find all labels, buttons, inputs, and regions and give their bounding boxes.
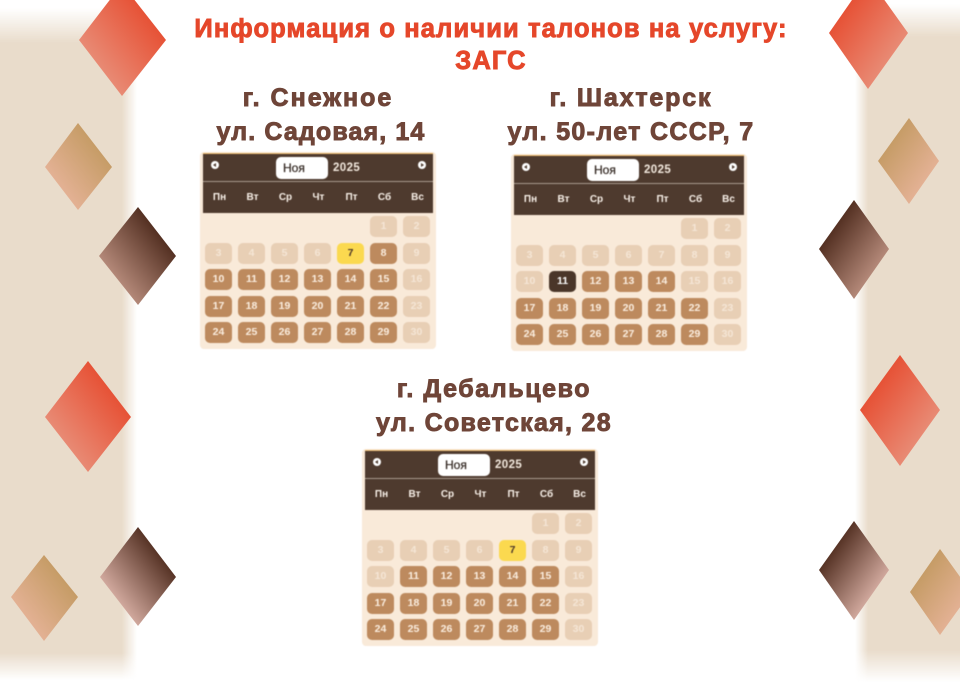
- day grid: 3: [378, 544, 383, 556]
- calendar header: [514, 155, 744, 215]
- day grid: 16: [411, 273, 422, 285]
- month select: Ноя: [283, 161, 305, 175]
- day grid: 11: [557, 275, 568, 287]
- day grid: 8: [543, 544, 548, 556]
- weekdays: Сб: [540, 489, 553, 500]
- day grid: 23: [722, 302, 733, 314]
- heading: Debaltsevo: [376, 375, 612, 437]
- day grid: 29: [378, 326, 389, 338]
- day grid: 28: [507, 623, 518, 635]
- day grid: 21: [656, 302, 667, 314]
- day grid: 9: [576, 544, 581, 556]
- weekdays: Ср: [279, 192, 292, 203]
- day grid: 1: [381, 220, 386, 232]
- heading: Shakhtyorsk: ул. 50-лет СССР, 7: [508, 118, 754, 146]
- calendar: Debaltsevo: [362, 449, 598, 646]
- day grid: 15: [689, 275, 700, 287]
- heading: Snezhnoe: [216, 84, 425, 146]
- day grid: 4: [411, 544, 416, 556]
- weekdays: Пт: [656, 194, 669, 205]
- next arrow: [418, 161, 426, 169]
- day grid: 5: [593, 248, 598, 260]
- month select: [587, 159, 639, 181]
- day grid: 19: [590, 302, 601, 314]
- day grid: 14: [656, 275, 667, 287]
- weekdays: Чт: [624, 194, 635, 205]
- day grid: 22: [540, 596, 551, 608]
- day grid: 17: [375, 596, 386, 608]
- day grid: 5: [444, 544, 449, 556]
- heading: Shakhtyorsk: [507, 84, 754, 146]
- weekdays: Ср: [441, 489, 454, 500]
- weekdays: Вс: [411, 192, 424, 203]
- day grid: [366, 512, 592, 641]
- day grid: 29: [689, 328, 700, 340]
- day grid: 8: [381, 246, 386, 258]
- month select: Ноя: [594, 163, 616, 177]
- day grid: 10: [375, 570, 386, 582]
- day grid: [204, 216, 430, 344]
- weekdays: Вс: [722, 194, 735, 205]
- day grid: 21: [507, 596, 518, 608]
- day grid: 19: [279, 300, 290, 312]
- day grid: 2: [576, 517, 581, 529]
- day grid: 26: [590, 328, 601, 340]
- day grid: 20: [623, 302, 634, 314]
- weekdays: Пн: [524, 194, 537, 205]
- year: 2025: [333, 162, 360, 174]
- title: [194, 15, 788, 75]
- day grid: 10: [213, 273, 224, 285]
- day grid: 15: [540, 570, 551, 582]
- previous arrow: [522, 163, 530, 171]
- heading: Shakhtyorsk: г. Шахтерск: [550, 84, 712, 112]
- day grid: 25: [557, 328, 568, 340]
- day grid: 12: [279, 273, 290, 285]
- day grid: 28: [345, 326, 356, 338]
- day grid: 18: [408, 596, 419, 608]
- day grid: 24: [375, 623, 386, 635]
- day grid: 27: [623, 328, 634, 340]
- day grid: 16: [722, 275, 733, 287]
- day grid: 30: [411, 326, 422, 338]
- day grid: 3: [216, 246, 221, 258]
- weekdays: [374, 489, 586, 500]
- heading: Debaltsevo: г. Дебальцево: [397, 375, 591, 403]
- weekdays: Пн: [375, 489, 388, 500]
- previous arrow: [373, 458, 381, 466]
- day grid: 1: [543, 517, 548, 529]
- day grid: 9: [725, 248, 730, 260]
- day grid: 17: [524, 302, 535, 314]
- weekdays: Вс: [573, 489, 586, 500]
- title: Информация о наличии талонов на услугу:: [194, 15, 788, 43]
- day grid: 5: [282, 246, 287, 258]
- day grid: 9: [414, 246, 419, 258]
- weekdays: Вт: [558, 194, 570, 205]
- weekdays: Вт: [408, 489, 420, 500]
- day grid: 26: [441, 623, 452, 635]
- right background band: [857, 10, 960, 677]
- year: 2025: [644, 164, 671, 176]
- day grid: [515, 218, 742, 346]
- month select: [438, 454, 490, 476]
- day grid: 27: [474, 623, 485, 635]
- calendar: Snezhnoe: [200, 152, 436, 349]
- day grid: 14: [507, 570, 518, 582]
- weekdays: Чт: [313, 192, 324, 203]
- day grid: 17: [213, 300, 224, 312]
- weekdays: Пн: [213, 192, 226, 203]
- day grid: 22: [378, 300, 389, 312]
- month select: Ноя: [445, 458, 467, 472]
- weekdays: [524, 194, 736, 205]
- weekdays: Вт: [246, 192, 258, 203]
- day grid: 7: [659, 248, 664, 260]
- calendar header: [365, 450, 595, 510]
- title: ЗАГС: [455, 47, 527, 75]
- day grid: 1: [692, 222, 697, 234]
- day grid: 4: [249, 246, 254, 258]
- weekdays: Чт: [475, 489, 486, 500]
- month select: [276, 157, 328, 179]
- day grid: 4: [560, 248, 565, 260]
- calendar: Shakhtyorsk: [511, 154, 747, 351]
- day grid: 18: [557, 302, 568, 314]
- weekdays: [212, 192, 424, 203]
- day grid: 28: [656, 328, 667, 340]
- previous arrow: [211, 161, 219, 169]
- day grid: 14: [345, 273, 356, 285]
- day grid: 24: [213, 326, 224, 338]
- day grid: 12: [441, 570, 452, 582]
- day grid: 25: [408, 623, 419, 635]
- day grid: 13: [623, 275, 634, 287]
- day grid: 25: [246, 326, 257, 338]
- day grid: 20: [312, 300, 323, 312]
- day grid: 24: [524, 328, 535, 340]
- weekdays: Сб: [378, 192, 391, 203]
- weekdays: Пт: [345, 192, 358, 203]
- day grid: 19: [441, 596, 452, 608]
- day grid: 23: [411, 300, 422, 312]
- day grid: 15: [378, 273, 389, 285]
- weekdays: Сб: [689, 194, 702, 205]
- heading: Snezhnoe: ул. Садовая, 14: [217, 118, 425, 146]
- heading: Snezhnoe: г. Снежное: [243, 84, 393, 112]
- year: 2025: [495, 459, 522, 471]
- day grid: 7: [348, 246, 353, 258]
- heading: Debaltsevo: ул. Советская, 28: [376, 409, 612, 437]
- weekdays: Ср: [590, 194, 603, 205]
- left background band: [0, 14, 134, 676]
- day grid: 6: [477, 544, 482, 556]
- day grid: 13: [474, 570, 485, 582]
- next arrow: [580, 458, 588, 466]
- day grid: 30: [573, 623, 584, 635]
- day grid: 23: [573, 596, 584, 608]
- day grid: 26: [279, 326, 290, 338]
- day grid: 11: [246, 273, 257, 285]
- day grid: 21: [345, 300, 356, 312]
- day grid: 13: [312, 273, 323, 285]
- day grid: 16: [573, 570, 584, 582]
- day grid: 8: [692, 248, 697, 260]
- day grid: 12: [590, 275, 601, 287]
- next arrow: [729, 163, 737, 171]
- day grid: 20: [474, 596, 485, 608]
- day grid: 2: [725, 222, 730, 234]
- day grid: 6: [315, 246, 320, 258]
- day grid: 2: [414, 220, 419, 232]
- day grid: 11: [408, 570, 419, 582]
- day grid: 27: [312, 326, 323, 338]
- day grid: 3: [527, 248, 532, 260]
- weekdays: Пт: [507, 489, 520, 500]
- day grid: 18: [246, 300, 257, 312]
- calendar header: [203, 153, 433, 213]
- day grid: 29: [540, 623, 551, 635]
- day grid: 7: [510, 544, 515, 556]
- day grid: 10: [524, 275, 535, 287]
- day grid: 22: [689, 302, 700, 314]
- day grid: 30: [722, 328, 733, 340]
- day grid: 6: [626, 248, 631, 260]
